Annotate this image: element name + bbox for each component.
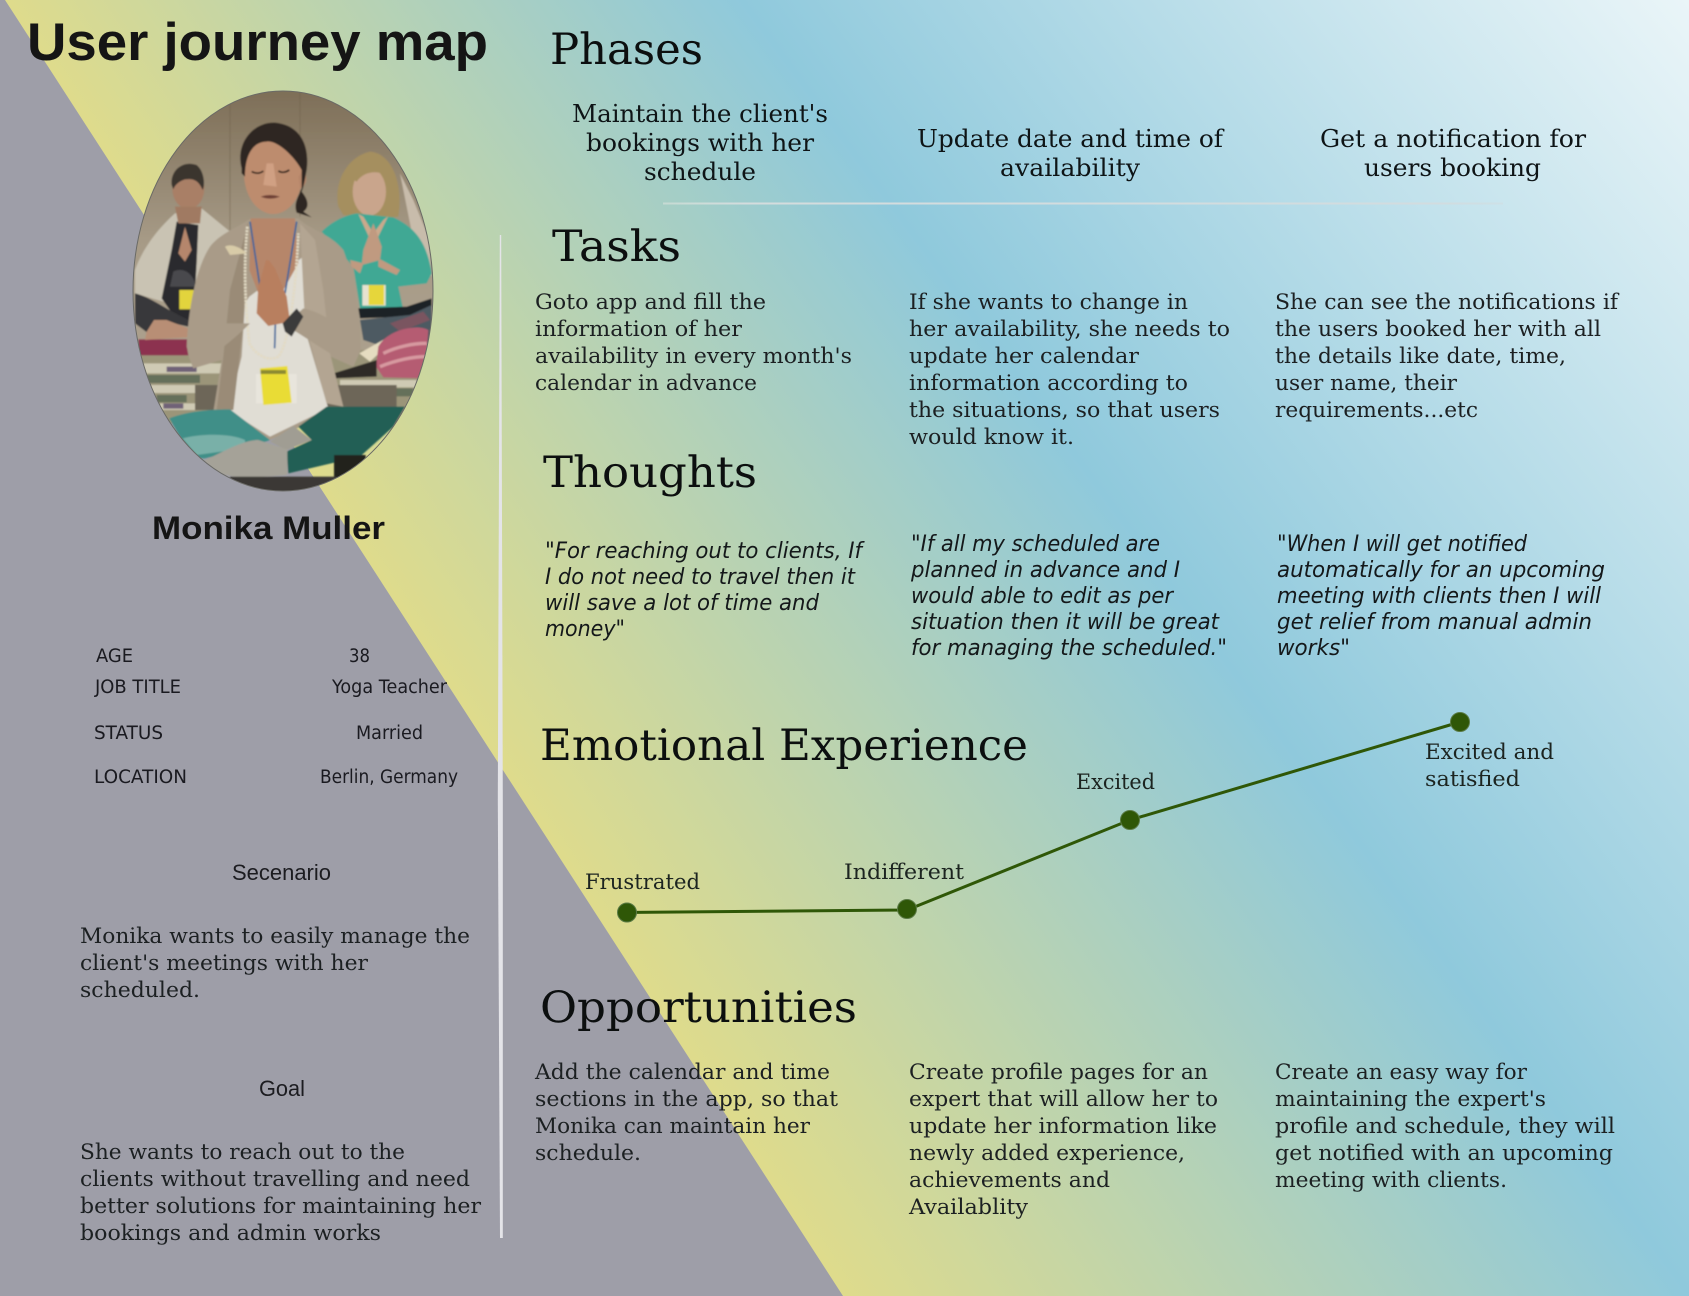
floor [130,350,436,423]
task 3: user name, their [1275,371,1458,396]
legs [169,409,270,458]
opportunity 2: update her information like [909,1114,1217,1139]
emotional experience heading: Emotional Experience [540,721,1028,771]
vertical divider [498,235,503,1238]
opportunities heading: Opportunities [540,983,857,1033]
thought 2: would able to edit as per [911,584,1175,609]
thought 1 [545,539,865,642]
opportunity 1 [534,1060,838,1166]
left seated person [135,208,230,302]
goal text: bookings and admin works [80,1221,381,1246]
emotion point: frustrated: Frustrated [585,870,700,895]
thought 2: "If all my scheduled are [911,532,1160,557]
persona details: 38 [349,646,370,667]
emotion point: excited [1076,770,1155,830]
opportunity 1: Monika can maintain her [535,1114,811,1139]
emotion point: excited and satisfied [1425,712,1554,792]
opportunity 3: profile and schedule, they will [1275,1114,1615,1139]
thought 1: money" [545,617,625,642]
opportunity 2 [908,1060,1218,1220]
phase 2: Update date and time of [917,125,1225,153]
phase 1 [572,100,828,186]
opportunity 2: Create profile pages for an [909,1060,1208,1085]
grey diagonal panel [0,0,843,1296]
scenario text [80,924,470,1003]
thought 2: situation then it will be great [911,610,1220,635]
persona details [94,646,458,788]
opportunity 1: Add the calendar and time [534,1060,830,1085]
phase 3 [1320,125,1587,182]
persona details: STATUS [94,723,163,744]
goal heading: Goal [259,1076,305,1101]
persona details: Yoga Teacher [331,677,447,698]
task 3 [1275,290,1620,423]
opportunity 3: Create an easy way for [1275,1060,1528,1085]
persona details: AGE [96,646,133,667]
thought 3: get relief from manual admin [1277,610,1592,635]
task 2: the situations, so that users [909,398,1220,423]
task 2 [909,290,1230,450]
phase 3: Get a notification for [1320,125,1587,153]
scenario text: scheduled. [80,978,200,1003]
opportunity 2: newly added experience, [909,1141,1185,1166]
central person [186,231,347,440]
scenario heading: Secenario [232,860,331,885]
task 2: update her calendar [909,344,1140,369]
thoughts heading: Thoughts [543,448,757,498]
emotion line chart [585,712,1554,922]
task 1: availability in every month's [535,344,852,369]
opportunity 1: sections in the app, so that [535,1087,838,1112]
phase 2: availability [1000,154,1140,182]
phase 1: schedule [644,158,756,186]
thought 2: planned in advance and I [910,558,1180,583]
goal text [80,1140,482,1246]
phase 3: users booking [1364,154,1541,182]
phase 1: bookings with her [586,129,815,157]
opportunity 2: Availablity [908,1195,1029,1220]
task 3: She can see the notifications if [1275,290,1620,315]
emotion point: excited and satisfied: Excited and [1425,740,1554,765]
task 1: information of her [535,317,743,342]
thought 3: meeting with clients then I will [1277,584,1601,609]
persona details: Berlin, Germany [320,767,458,788]
persona details: JOB TITLE [94,677,181,698]
persona details: Married [356,723,423,744]
thought 3: automatically for an upcoming [1277,558,1605,583]
thought 3: "When I will get notified [1277,532,1528,557]
thought 2 [910,532,1227,661]
task 2: her availability, she needs to [909,317,1230,342]
phase 1: Maintain the client's [572,100,828,128]
right seated person [337,152,400,220]
scenario text: Monika wants to easily manage the [80,924,470,949]
thought 3: works" [1277,636,1350,661]
task 2: If she wants to change in [909,290,1188,315]
emotion point: indifferent: Indifferent [844,860,964,885]
title: User journey map [27,13,488,72]
goal text: She wants to reach out to the [80,1140,405,1165]
thought 1: I do not need to travel then it [545,565,856,590]
opportunity 2: expert that will allow her to [909,1087,1218,1112]
phase 2 [917,125,1225,182]
persona photo [130,90,436,492]
task 1: Goto app and fill the [535,290,766,315]
task 3: the users booked her with all [1275,317,1601,342]
persona details: LOCATION [94,767,187,788]
opportunity 3 [1275,1060,1615,1193]
opportunity 2: achievements and [909,1168,1110,1193]
emotion point: indifferent [844,860,964,918]
goal text: better solutions for maintaining her [80,1194,482,1219]
task 3: requirements...etc [1275,398,1478,423]
task 2: would know it. [909,425,1074,450]
thought 1: will save a lot of time and [545,591,820,616]
tasks heading: Tasks [552,222,681,272]
task 3: the details like date, time, [1275,344,1566,369]
thought 2: for managing the scheduled." [911,636,1227,661]
emotion point: frustrated [585,870,700,922]
task 2: information according to [909,371,1188,396]
persona name: Monika Muller [152,510,385,546]
phases heading: Phases [550,25,703,75]
scenario text: client's meetings with her [80,951,369,976]
emotion point: excited and satisfied: satisfied [1425,767,1520,792]
opportunity 1: schedule. [535,1141,641,1166]
task 1: calendar in advance [535,371,757,396]
goal text: clients without travelling and need [80,1167,470,1192]
opportunity 3: maintaining the expert's [1275,1087,1546,1112]
opportunity 3: meeting with clients. [1275,1168,1507,1193]
task 1 [535,290,852,396]
opportunity 3: get notified with an upcoming [1275,1141,1613,1166]
emotion point: excited: Excited [1076,770,1155,795]
thought 3 [1277,532,1605,661]
thought 1: "For reaching out to clients, If [545,539,865,564]
